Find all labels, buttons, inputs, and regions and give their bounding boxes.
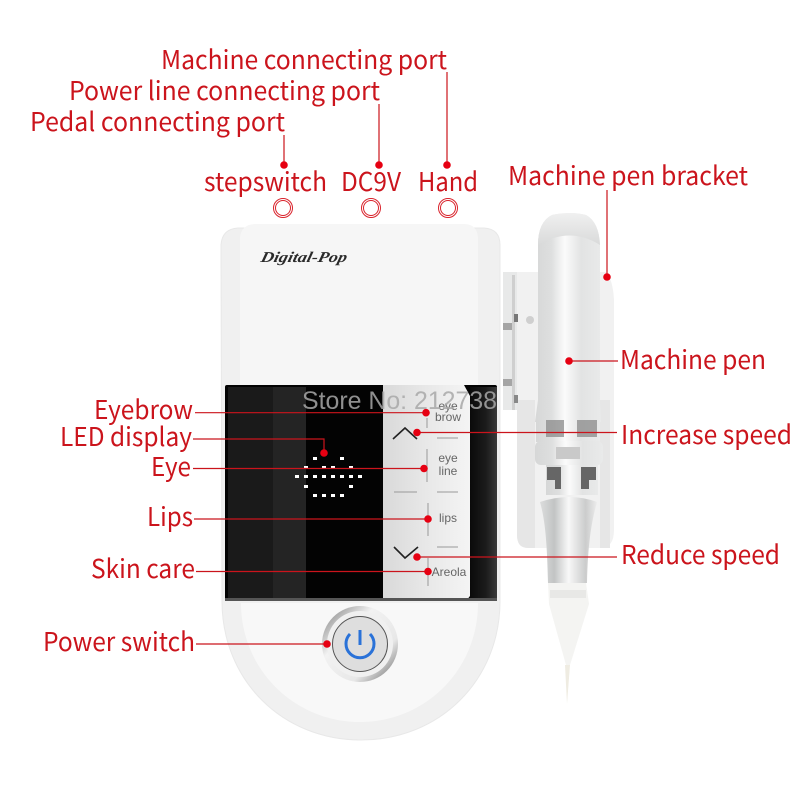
labels: right side bbox=[508, 156, 792, 572]
labels: left side: Eye bbox=[151, 447, 191, 484]
callout dots bbox=[280, 161, 611, 648]
touch strip labels: brow bbox=[435, 410, 461, 424]
callout leader lines bbox=[193, 72, 618, 644]
needle cartridge bbox=[548, 583, 589, 665]
labels: top ports bbox=[30, 40, 478, 199]
touch strip labels: lips bbox=[439, 511, 457, 525]
touch strip labels: Areola bbox=[432, 565, 467, 579]
labels: right side: Machine pen bracket bbox=[508, 156, 748, 193]
labels: top ports: Pedal connecting port bbox=[30, 102, 285, 139]
brand logo: Digital-Pop bbox=[258, 249, 350, 266]
LED display dots bbox=[295, 457, 362, 497]
labels: left side: LED display bbox=[60, 417, 192, 454]
labels: top ports: Hand bbox=[418, 162, 478, 199]
labels: top ports: Power line connecting port bbox=[69, 71, 380, 108]
machine body bbox=[221, 224, 500, 740]
touch strip labels: line bbox=[439, 464, 458, 478]
control panel bbox=[225, 385, 497, 601]
power button bbox=[322, 606, 398, 682]
labels: left side: Skin care bbox=[91, 549, 195, 586]
labels: left side bbox=[43, 390, 195, 659]
touch strip labels bbox=[432, 399, 467, 579]
needle bbox=[565, 665, 570, 704]
up arrow bbox=[393, 428, 417, 439]
lower cover plate bbox=[241, 603, 478, 722]
pen barrel bbox=[535, 213, 601, 422]
labels: right side: Reduce speed bbox=[621, 535, 780, 572]
labels: right side: Increase speed bbox=[621, 415, 792, 452]
machine pen bbox=[535, 213, 603, 704]
watermark: Store No: 212738 bbox=[302, 387, 497, 415]
touch strip labels: eye bbox=[438, 451, 458, 465]
pen cone bbox=[540, 497, 597, 583]
touch strip labels: eye bbox=[438, 399, 458, 413]
labels: left side: Lips bbox=[147, 497, 193, 534]
top cover plate bbox=[240, 224, 478, 386]
down arrow bbox=[394, 547, 418, 558]
knurled grip bbox=[536, 420, 600, 442]
pen collar bbox=[535, 441, 603, 465]
silver touch strip bbox=[383, 385, 470, 601]
touch strip marks bbox=[394, 418, 458, 586]
labels: left side: Eyebrow bbox=[94, 390, 193, 427]
labels: top ports: DC9V bbox=[341, 162, 401, 199]
labels: left side: Power switch bbox=[43, 622, 195, 659]
labels: top ports: stepswitch bbox=[204, 162, 327, 199]
machine pen bracket bbox=[503, 272, 614, 548]
port markers bbox=[274, 198, 458, 218]
labels: right side: Machine pen bbox=[620, 340, 766, 377]
labels: top ports: Machine connecting port bbox=[161, 40, 447, 77]
notched band bbox=[546, 465, 598, 495]
